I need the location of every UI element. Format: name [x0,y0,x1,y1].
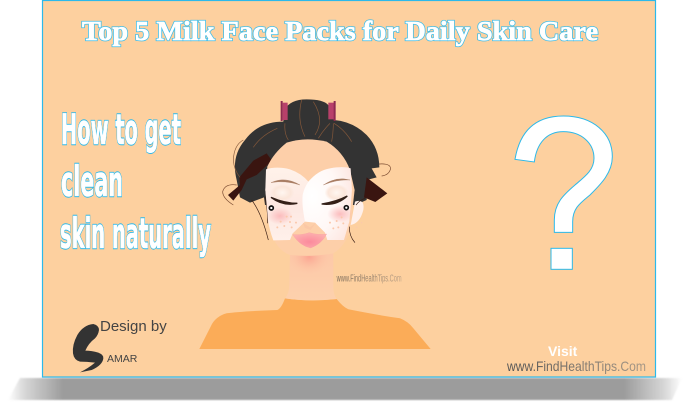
eyebrows [271,180,300,185]
visit website: www.FindHealthTips.Com [506,358,646,374]
name: AMAR [107,353,138,365]
hair dark underside right [364,177,387,202]
neck [285,253,337,300]
text: skin naturally [60,209,211,258]
hair [235,99,379,205]
icon: S logo [73,324,103,372]
panel shadow [8,378,682,400]
design by text: Design by [100,318,167,335]
illustration: woman with milk face pack [199,99,431,349]
hair strands behind [223,164,391,205]
watermark: www.FindHealthTips.Com [336,273,402,284]
lips [293,233,327,248]
closed eyes [271,196,347,204]
text: skin naturally [60,209,211,258]
hair clip left [281,101,288,121]
ear right [351,201,364,225]
visit website: Visit [548,343,578,359]
question mark icon [515,116,612,269]
nose [303,223,316,230]
side hair strands [252,197,365,243]
heading: how to get clean skin naturally: clean [61,157,123,206]
heading: how to get clean skin naturally: How to get [61,105,181,154]
heading: how to get clean skin naturally [60,105,211,258]
title: Top 5 Milk Face Packs for Daily Skin Care [82,16,598,46]
heading: how to get clean skin naturally: How to get [61,105,181,154]
shirt [199,298,431,349]
milk mask left [265,168,308,240]
freckles [276,216,362,229]
hair strands [233,100,352,177]
designer credit [73,318,167,372]
earrings [269,206,348,210]
heading: how to get clean skin naturally: clean [61,157,123,206]
hair clip right [328,101,336,121]
visit website [506,343,646,374]
blush [267,207,293,225]
hair dark underside left [228,153,272,201]
face [265,139,355,256]
title: Top 5 Milk Face Packs for Daily Skin Care [82,16,598,46]
milk mask right [302,167,352,240]
eyelids [270,184,294,201]
